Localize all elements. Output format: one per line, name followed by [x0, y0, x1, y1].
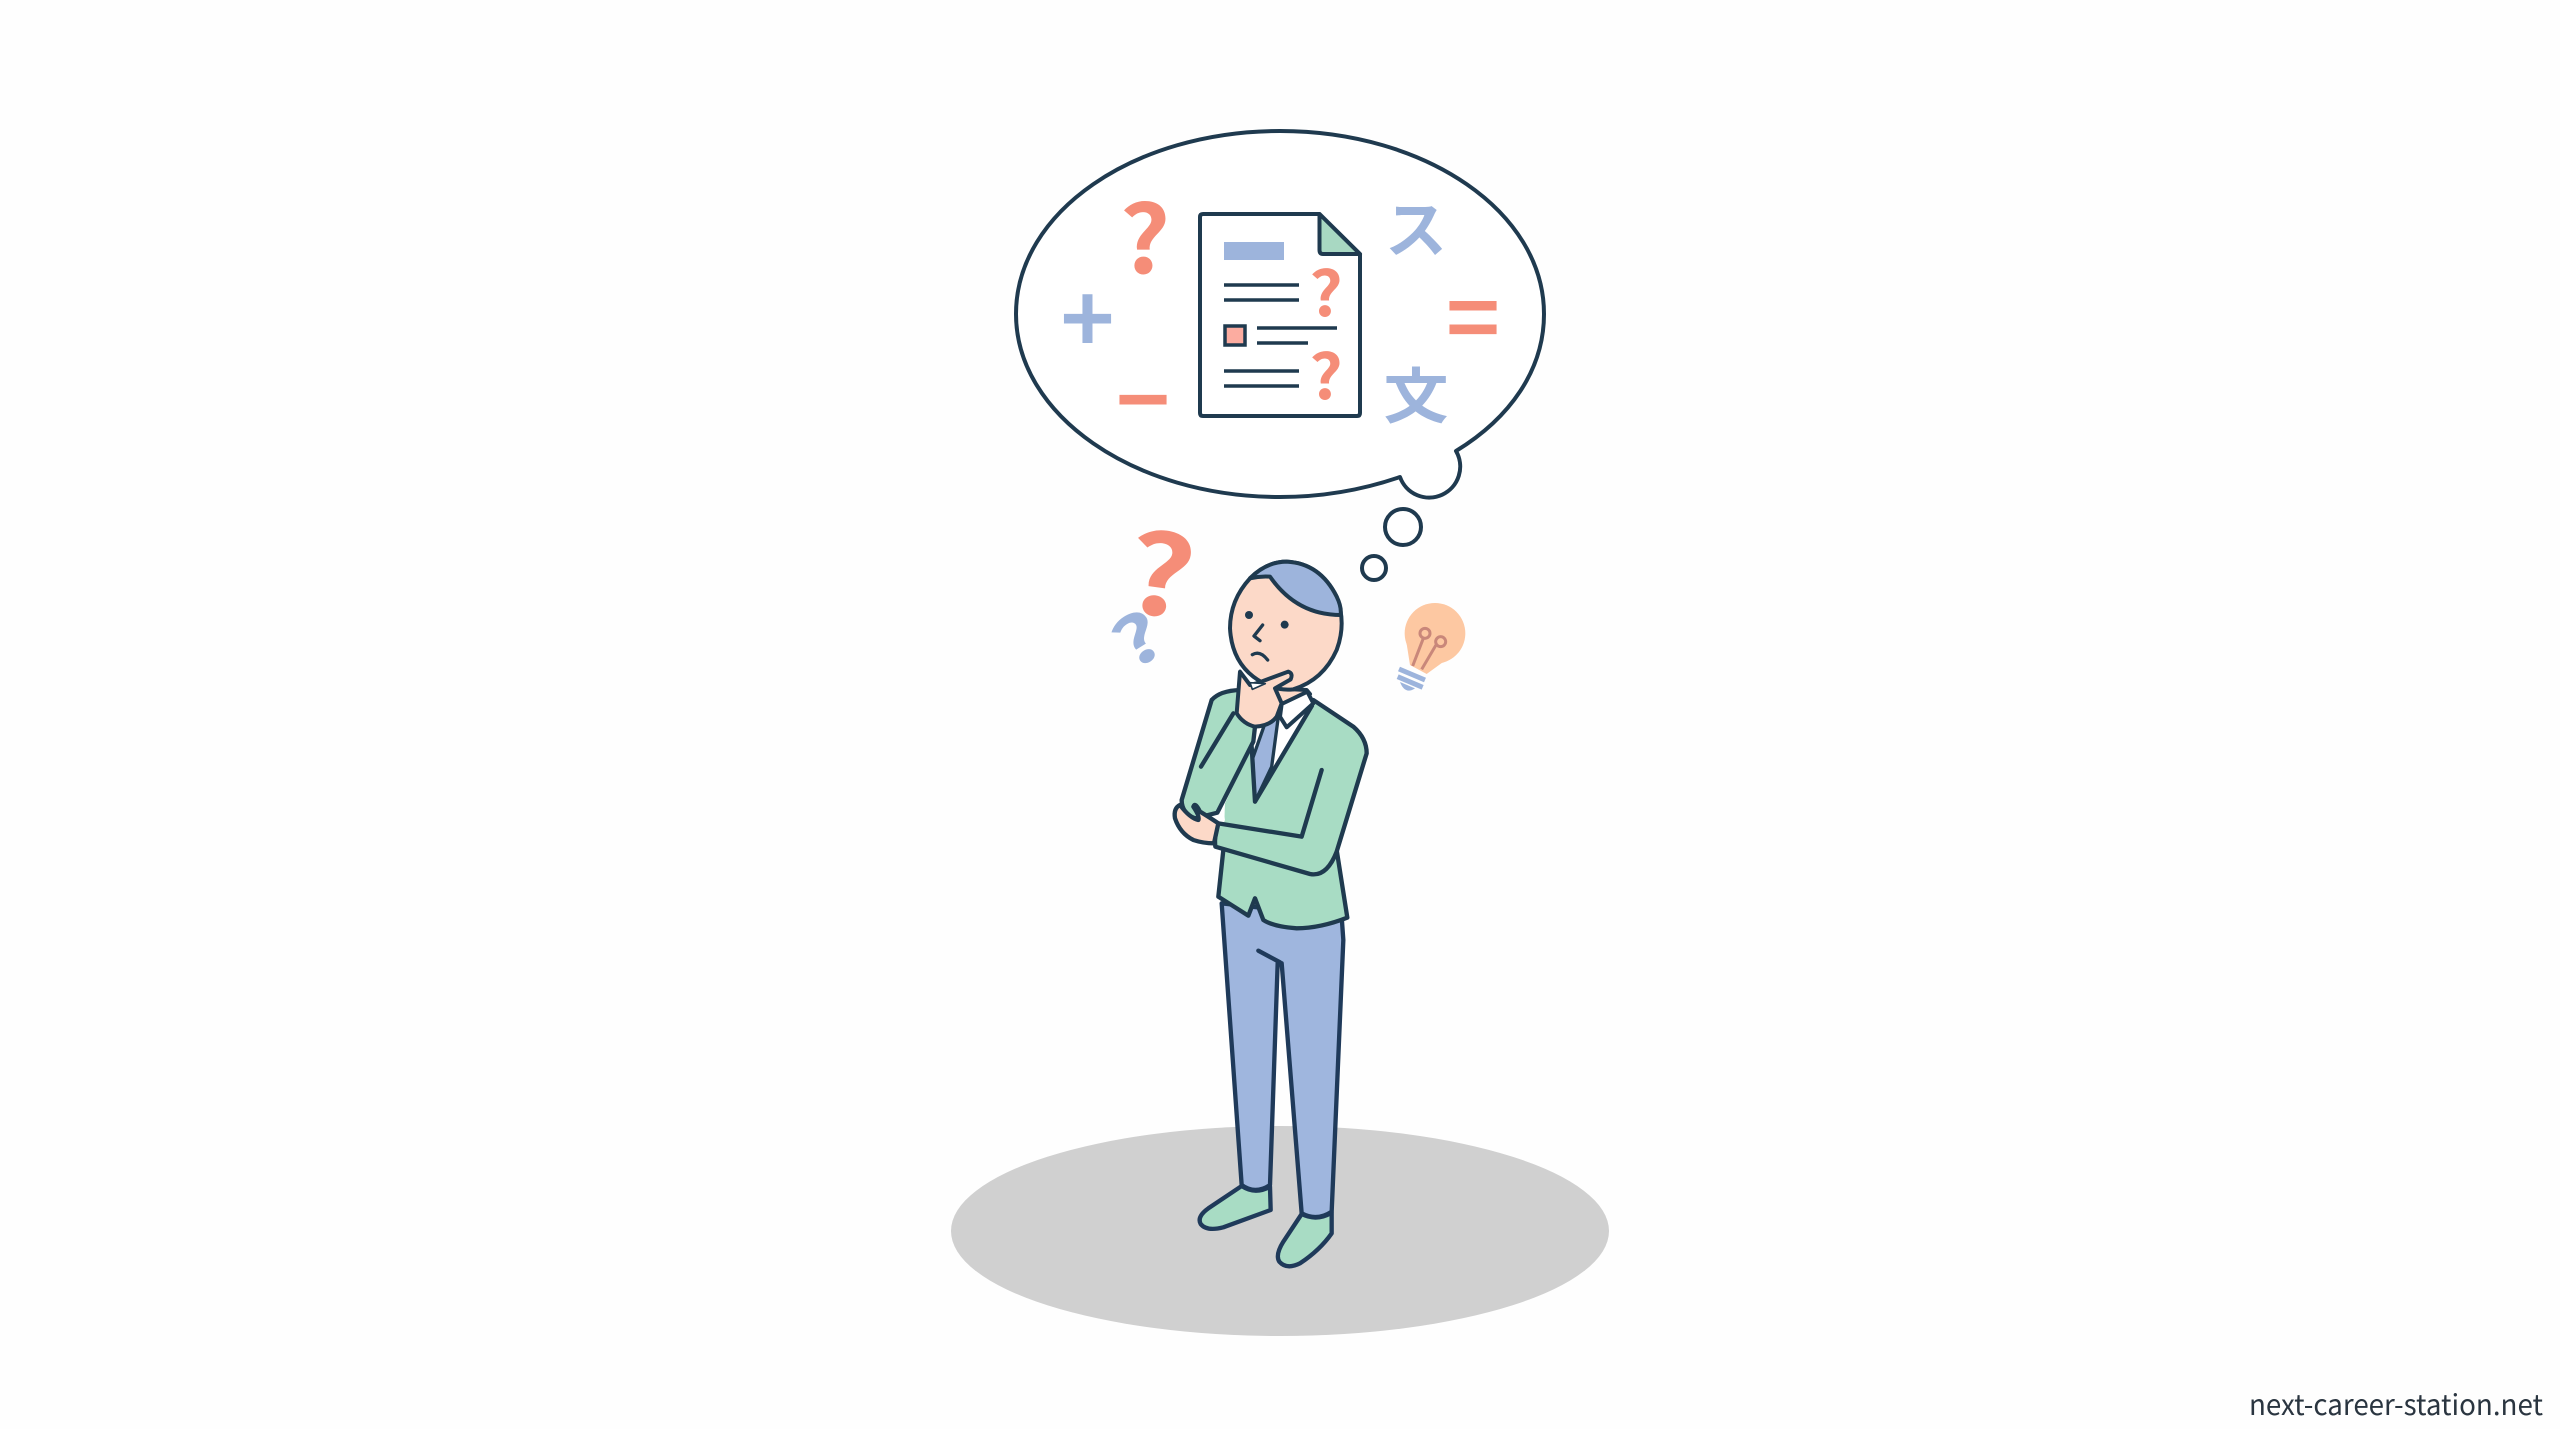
katakana su: ス	[1385, 180, 1447, 270]
eyes	[1245, 611, 1253, 619]
lower hand	[1175, 805, 1218, 843]
mouth	[1252, 653, 1268, 660]
question mark in bubble: ?	[1120, 165, 1170, 300]
head and raised hand	[1230, 562, 1342, 727]
elbow gap	[1219, 806, 1225, 821]
jacket hem	[1218, 850, 1347, 928]
website credit: next-career-station.net	[2249, 1382, 2543, 1424]
document icon: ?	[1309, 245, 1343, 335]
large question mark beside head: ?	[1118, 484, 1206, 651]
nose	[1254, 625, 1263, 641]
document icon	[1200, 214, 1360, 418]
equals sign: =	[1446, 246, 1500, 379]
forearm	[1215, 700, 1367, 874]
person	[1175, 562, 1367, 1266]
thought bubble	[1016, 131, 1544, 498]
light bulb icon	[1398, 603, 1465, 691]
raised hand	[1237, 672, 1292, 727]
necktie	[1253, 717, 1278, 802]
thought circle small	[1362, 556, 1386, 580]
floor shadow ellipse	[951, 1126, 1609, 1336]
neck	[1275, 688, 1310, 704]
face	[1230, 562, 1342, 690]
document icon: ?	[1309, 328, 1343, 418]
collar	[1280, 692, 1313, 727]
jacket and shirt	[1175, 690, 1367, 928]
upper arm	[1182, 690, 1255, 818]
minus sign: −	[1116, 328, 1170, 461]
thought circle large	[1385, 509, 1421, 545]
trousers	[1222, 903, 1343, 1217]
plus sign: +	[1060, 247, 1115, 380]
shirt	[1252, 698, 1313, 802]
shoes	[1200, 1186, 1332, 1266]
small question mark beside head: ?	[1091, 583, 1181, 689]
hair	[1250, 562, 1341, 615]
kanji bun: 文	[1384, 349, 1448, 435]
